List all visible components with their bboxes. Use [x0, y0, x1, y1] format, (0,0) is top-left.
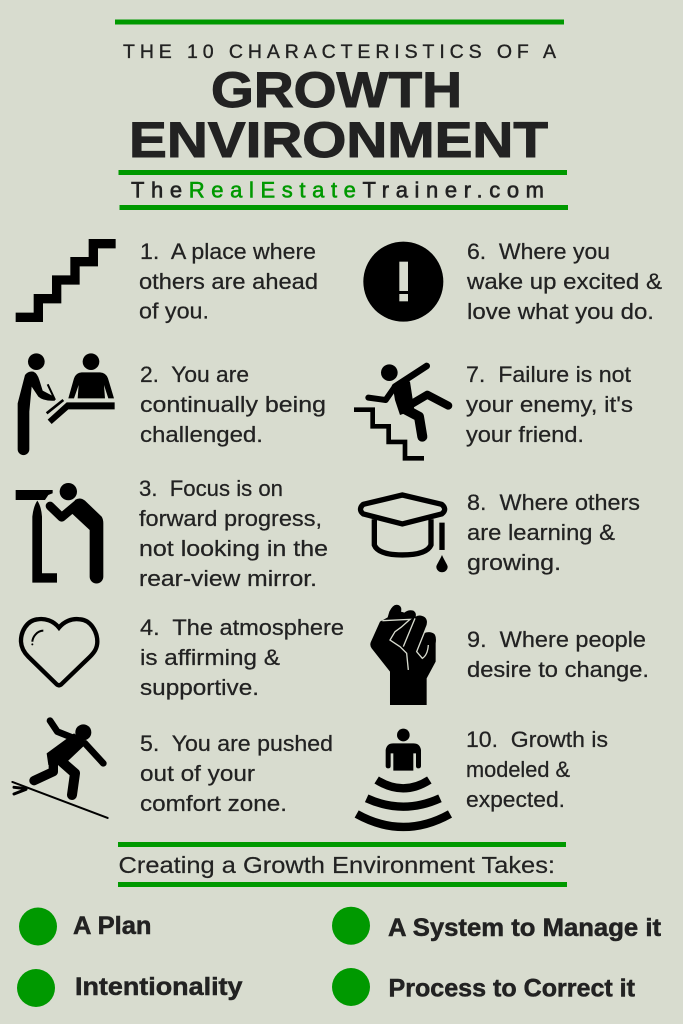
icon: person with signal arcs	[357, 729, 450, 827]
icon: falling on stairs	[354, 364, 448, 458]
text 6: wake up excited &	[466, 269, 662, 294]
icon: raised fist	[370, 605, 436, 705]
text 4: 4. The atmosphere	[140, 615, 344, 640]
footer heading text: Creating a Growth Environment Takes:	[118, 852, 555, 878]
item 10	[357, 727, 608, 827]
text 5: out of your	[140, 761, 255, 786]
item 9	[370, 605, 649, 705]
title: GROWTH: GROWTH	[211, 62, 462, 118]
text 3: rear-view mirror.	[139, 566, 317, 591]
icon: stairs	[16, 244, 116, 317]
subtitle: THE 10 CHARACTERISTICS OF A	[123, 41, 556, 63]
text 7: 7. Failure is not	[466, 362, 631, 387]
text 10: modeled &	[466, 757, 570, 782]
text 2: 2. You are	[140, 362, 249, 387]
text 6: love what you do.	[467, 299, 654, 324]
text 5: 5. You are pushed	[140, 731, 333, 756]
text 5: comfort zone.	[140, 791, 287, 816]
text 2: continually being	[140, 392, 326, 417]
text 10: expected.	[466, 787, 565, 812]
item 3	[16, 476, 328, 591]
item 4	[21, 615, 344, 700]
bullet: A System to Manage it: A System to Manage it	[388, 914, 662, 942]
text 8: 8. Where others	[467, 490, 640, 515]
panel: footer heading	[118, 842, 567, 887]
text 4: is affirming &	[140, 645, 280, 670]
item 7	[354, 362, 633, 458]
bullet: A Plan: A Plan	[73, 912, 152, 940]
text 1: others are ahead	[139, 269, 318, 294]
text 3	[139, 476, 328, 591]
bullet: Process to Correct it	[332, 968, 636, 1006]
bullet: A Plan	[19, 908, 152, 946]
bullet: Intentionality: Intentionality	[75, 973, 243, 1001]
bullet: Intentionality	[17, 969, 243, 1007]
icon: heart	[21, 619, 97, 685]
icon: surfer	[12, 721, 108, 818]
icon: person at telescope	[16, 483, 103, 583]
panel: header	[115, 20, 568, 210]
text 5	[140, 731, 333, 816]
item 1	[16, 239, 318, 324]
text 10: 10. Growth is	[466, 727, 608, 752]
text 1	[139, 239, 318, 324]
panel: requirements list	[17, 907, 662, 1007]
item 8	[360, 490, 640, 575]
text 3: 3. Focus is on	[139, 476, 283, 501]
text 1: 1. A place where	[140, 239, 316, 264]
text 7: your friend.	[466, 422, 584, 447]
text 2	[140, 362, 326, 447]
text 1: of you.	[139, 298, 209, 324]
text 3: forward progress,	[139, 506, 322, 531]
text 8	[467, 490, 640, 575]
text 7: your enemy, it's	[466, 392, 633, 417]
text 8: are learning &	[467, 520, 615, 545]
title: ENVIRONMENT: ENVIRONMENT	[129, 112, 548, 168]
icon: exclamation circle	[363, 242, 443, 322]
text 3: not looking in the	[139, 536, 328, 561]
text 6	[466, 239, 662, 324]
icon: people at desk	[18, 353, 115, 455]
website: The RealEstate Trainer.com	[131, 178, 544, 202]
text 7	[466, 362, 633, 447]
text 4: supportive.	[140, 675, 259, 700]
text 9: desire to change.	[467, 657, 649, 682]
bullet: Process to Correct it: Process to Correct it	[388, 975, 636, 1003]
text 10	[466, 727, 608, 812]
bullet: A System to Manage it	[332, 907, 662, 945]
item 2	[18, 353, 326, 455]
item 6	[363, 239, 662, 324]
text 9	[467, 627, 649, 682]
text 8: growing.	[467, 550, 561, 575]
text 4	[140, 615, 344, 700]
text 2: challenged.	[140, 422, 263, 447]
text 6: 6. Where you	[467, 239, 610, 264]
item 5	[12, 721, 333, 818]
icon: graduation cap	[360, 495, 448, 572]
text 9: 9. Where people	[467, 627, 646, 652]
